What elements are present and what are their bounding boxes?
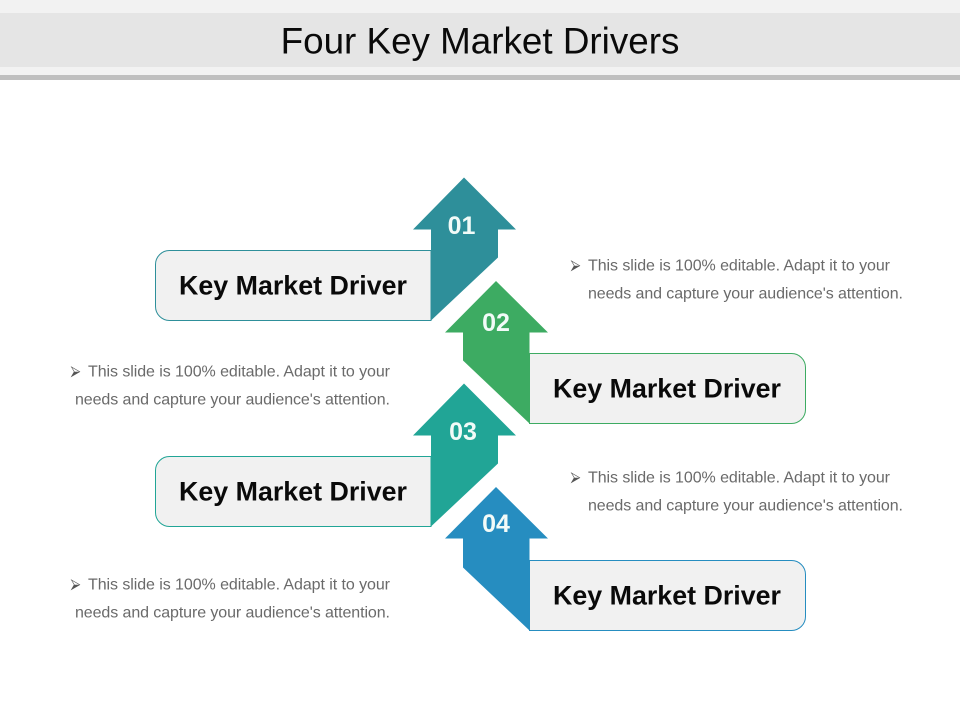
arrow 02	[445, 281, 548, 424]
title: Four Key Market Drivers	[281, 20, 679, 62]
driver 02	[445, 281, 806, 424]
label box 01: Key Market Driver	[179, 270, 408, 300]
text block: driver 04	[70, 576, 391, 622]
arrow 03	[413, 384, 516, 526]
label box 03: Key Market Driver	[179, 476, 408, 506]
text block: driver 02: This slide is 100% editable. Adapt it to your	[88, 364, 391, 380]
arrow 03: 03	[449, 418, 477, 446]
label box 02: Key Market Driver	[553, 374, 782, 404]
text block: driver 03: ⮚	[570, 468, 580, 484]
driver 01	[156, 178, 516, 320]
text block: driver 04: needs and capture your audience's attention.	[75, 604, 390, 622]
title band	[0, 0, 960, 80]
text block: driver 01: needs and capture your audience's attention.	[588, 286, 903, 302]
driver 03	[156, 384, 516, 526]
text block: driver 02	[70, 362, 391, 408]
text block: driver 02: needs and capture your audience's attention.	[75, 392, 390, 408]
label box 03	[156, 456, 431, 526]
arrow 04: 04	[482, 510, 510, 538]
label box 04: Key Market Driver	[553, 580, 782, 610]
arrow 01	[413, 178, 516, 320]
label box 01	[156, 250, 431, 320]
text block: driver 04: This slide is 100% editable. Adapt it to your	[88, 576, 391, 594]
label box 02	[530, 354, 806, 424]
text block: driver 04: ⮚	[70, 576, 80, 592]
text block: driver 03	[570, 468, 903, 514]
driver 04	[445, 487, 806, 630]
arrow 04	[445, 487, 548, 630]
arrow 02: 02	[482, 309, 510, 337]
text block: driver 03: This slide is 100% editable. Adapt it to your	[588, 470, 891, 486]
text block: driver 02: ⮚	[70, 362, 80, 378]
arrow 01: 01	[448, 212, 475, 240]
text block: driver 01: ⮚	[570, 256, 580, 272]
text block: driver 01	[570, 256, 903, 302]
text block: driver 03: needs and capture your audience's attention.	[588, 498, 903, 514]
label box 04	[530, 560, 806, 630]
text block: driver 01: This slide is 100% editable. Adapt it to your	[588, 258, 891, 274]
